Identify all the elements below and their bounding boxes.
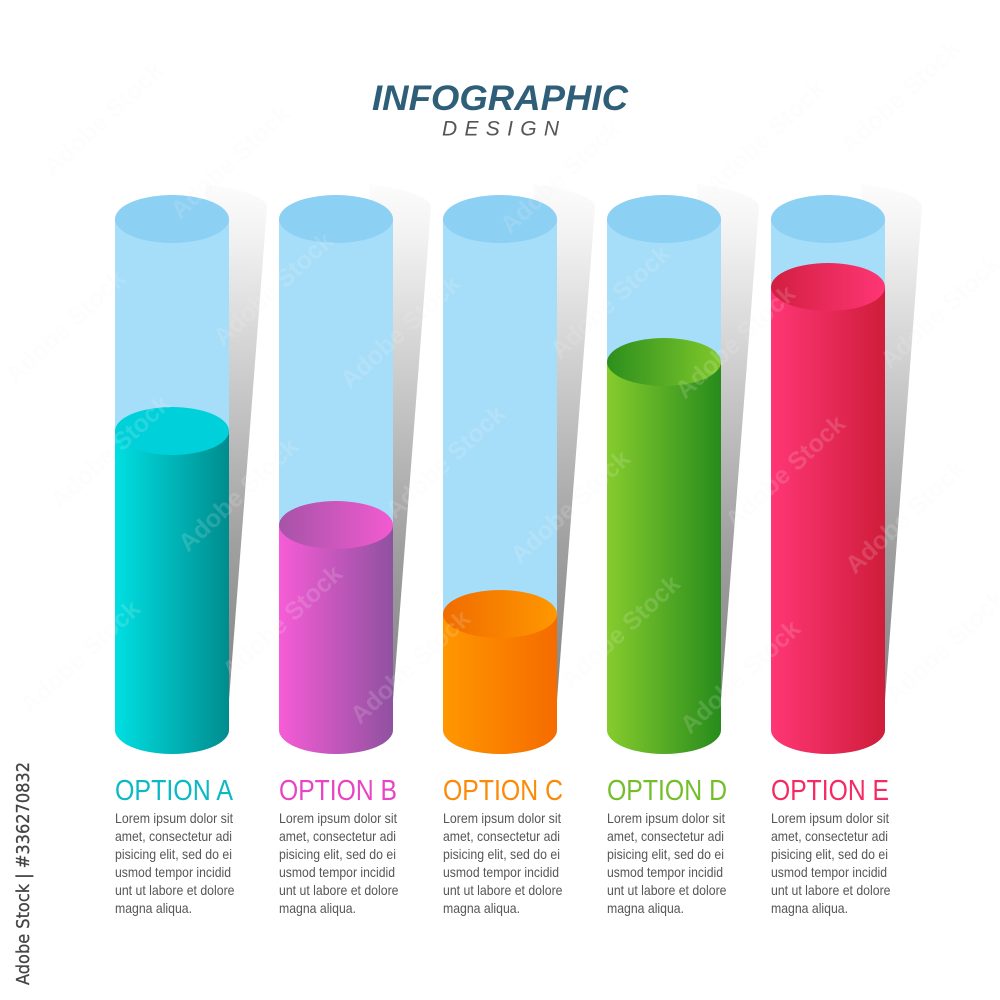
glass tube B [279, 219, 393, 754]
glass top E [771, 195, 885, 243]
description C: pisicing elit, sed do ei [443, 846, 560, 862]
description E: unt ut labore et dolore [771, 882, 891, 898]
stock watermark: Adobe Stock [335, 270, 466, 394]
stock watermark: Adobe Stock [15, 595, 146, 719]
shadow C [533, 184, 595, 700]
description B: magna aliqua. [279, 900, 356, 916]
subheading: design: DESIGN [442, 118, 560, 140]
label D: OPTION D [607, 775, 727, 807]
description E: magna aliqua. [771, 900, 848, 916]
stock watermark: Adobe Stock [835, 35, 966, 159]
glass tube E [771, 219, 885, 754]
column: option C [443, 184, 595, 916]
description B: amet, consectetur adi [279, 828, 396, 844]
glass top B [279, 195, 393, 243]
description B: pisicing elit, sed do ei [279, 846, 396, 862]
glass tube A [115, 219, 229, 754]
shadow A [205, 184, 267, 700]
bar top B [279, 501, 393, 549]
stock watermark: Adobe Stock [670, 280, 801, 404]
description C: amet, consectetur adi [443, 828, 560, 844]
glass tube C [443, 219, 557, 754]
stock watermark: Adobe Stock [495, 115, 626, 239]
shadow E [861, 184, 922, 700]
description C: magna aliqua. [443, 900, 520, 916]
description A: amet, consectetur adi [115, 828, 232, 844]
description C: usmod tempor incidid [443, 864, 559, 880]
stock id side text: Adobe Stock | #336270832 [13, 762, 34, 985]
description A: Lorem ipsum dolor sit [115, 810, 233, 826]
stock watermark: Adobe Stock [700, 75, 831, 199]
description C: Lorem ipsum dolor sit [443, 810, 561, 826]
bar C [443, 614, 557, 754]
glass tube D [607, 219, 721, 754]
column: option D [607, 184, 759, 916]
glass top C [443, 195, 557, 243]
column: option B [279, 184, 431, 916]
label B: OPTION B [279, 775, 397, 807]
stock watermark: Adobe Stock [217, 560, 348, 684]
heading: infographic: INFOGRAPHIC [372, 79, 629, 118]
description E: pisicing elit, sed do ei [771, 846, 888, 862]
description B: unt ut labore et dolore [279, 882, 399, 898]
description D: usmod tempor incidid [607, 864, 723, 880]
glass top A [115, 195, 229, 243]
description E: amet, consectetur adi [771, 828, 888, 844]
description A: unt ut labore et dolore [115, 882, 235, 898]
stock watermark: Adobe Stock [675, 615, 806, 739]
description A: magna aliqua. [115, 900, 192, 916]
stock watermark: Adobe Stock [380, 400, 511, 524]
description A: pisicing elit, sed do ei [115, 846, 232, 862]
description D: pisicing elit, sed do ei [607, 846, 724, 862]
description E: usmod tempor incidid [771, 864, 887, 880]
column: option E [771, 184, 922, 916]
description B [279, 810, 399, 916]
stock watermark: Adobe Stock [0, 265, 131, 389]
stock watermark: Adobe Stock [345, 605, 476, 729]
description C [443, 810, 563, 916]
stock watermark: Adobe Stock [555, 570, 686, 694]
stock watermark: Adobe Stock [173, 433, 304, 557]
shadow B [369, 184, 431, 700]
glass top D [607, 195, 721, 243]
stock watermark: Adobe Stock [45, 390, 176, 514]
description D: magna aliqua. [607, 900, 684, 916]
title [372, 79, 629, 140]
description B: usmod tempor incidid [279, 864, 395, 880]
description D: amet, consectetur adi [607, 828, 724, 844]
bar top A [115, 407, 229, 455]
description D [607, 810, 727, 916]
label C: OPTION C [443, 775, 563, 807]
shadow D [697, 184, 759, 700]
stock watermark [0, 35, 1000, 739]
description D: unt ut labore et dolore [607, 882, 727, 898]
stock watermark: Adobe Stock [840, 455, 971, 579]
description A: usmod tempor incidid [115, 864, 231, 880]
bar top C [443, 590, 557, 638]
bar top E [771, 263, 885, 311]
description D: Lorem ipsum dolor sit [607, 810, 725, 826]
bar A [115, 431, 229, 754]
stock watermark: Adobe Stock [720, 410, 851, 534]
stock watermark: Adobe Stock [505, 445, 636, 569]
column: option A [115, 184, 267, 916]
stock watermark: Adobe Stock [208, 227, 339, 351]
label A: OPTION A [115, 775, 233, 807]
description A [115, 810, 235, 916]
bar top D [607, 338, 721, 386]
bar D [607, 362, 721, 754]
stock watermark: Adobe Stock [545, 240, 676, 364]
label E: OPTION E [771, 775, 889, 807]
description E: Lorem ipsum dolor sit [771, 810, 889, 826]
description B: Lorem ipsum dolor sit [279, 810, 397, 826]
stock watermark: Adobe Stock [165, 100, 296, 224]
description E [771, 810, 891, 916]
description C: unt ut labore et dolore [443, 882, 563, 898]
bar E [771, 287, 885, 754]
bar B [279, 525, 393, 754]
stock watermark: Adobe Stock [38, 57, 169, 181]
